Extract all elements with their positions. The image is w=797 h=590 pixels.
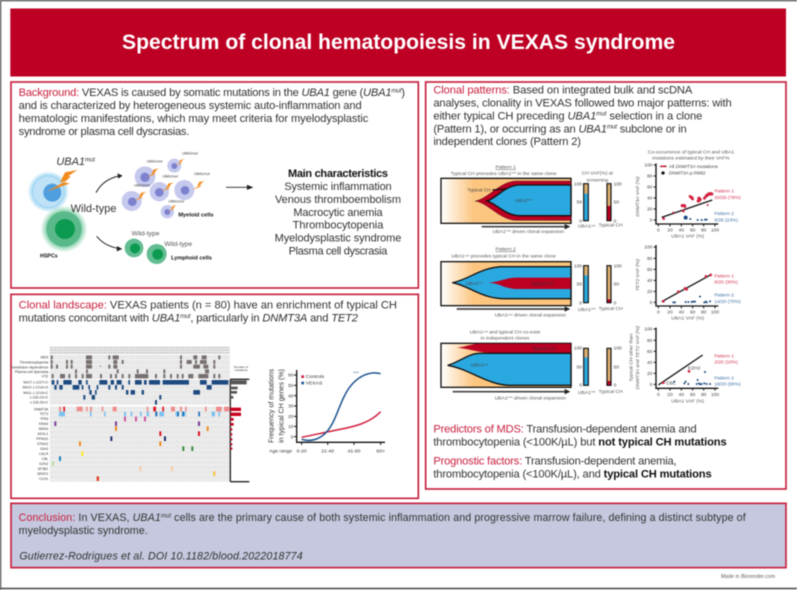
scatter plot: other typical CH VAF: Pattern 1 (714, 354, 734, 360)
legend: Controls (306, 374, 325, 380)
scatter plot: TET2 VAF: 14/20 (70%) (714, 299, 741, 305)
legend (301, 374, 325, 386)
row labels: STAG2 (37, 442, 48, 446)
clonal patterns text: mut (607, 124, 617, 131)
clonal landscape text: Clonal landscape: VEXAS patients (n = 80) have an enrichment of typical CH (19, 300, 397, 312)
conclusion text: mut (161, 514, 171, 520)
scatter plot: other typical CH VAF: 60 (690, 392, 696, 398)
pattern 1 fish plot: UBA1 (493, 229, 506, 235)
pattern 1 fish plot (441, 164, 571, 235)
clonal patterns text: selection in a clone (606, 110, 702, 122)
scatter plot: DNMT3A VAF: 20 (647, 207, 653, 213)
pattern 1 fish plot: mut (511, 171, 516, 175)
scatter plot: other typical CH VAF: Typical CH other than (628, 333, 634, 382)
pattern 1 stacked bars (574, 171, 623, 230)
myeloid cells (122, 159, 194, 218)
row labels: Plasma cell dyscrasia (15, 370, 48, 374)
pattern 1 stacked bars: 0 (614, 218, 617, 224)
row labels: CUX1 (39, 477, 48, 481)
row labels: CALR (39, 452, 49, 456)
scatter plot: other typical CH VAF: 40 (647, 360, 653, 366)
predictors and prognostic factors text: thrombocytopenia (<100K/µL) but not typical CH mutations (433, 437, 727, 449)
pattern 2 fish plot: mut (478, 281, 483, 285)
row labels: TP53 (40, 417, 48, 421)
scatter plot: DNMT3A VAF: 60 (690, 227, 696, 233)
diagram: HSPC differentiation: UBA1mut (162, 175, 179, 179)
pattern 2 fish plot: UBA1 (466, 282, 478, 287)
pattern 1 stacked bars: CH VAF(%) at (582, 171, 614, 177)
scatter plot: TET2 VAF: 80 (647, 256, 653, 262)
scatter plot: other typical CH VAF: 40 (679, 392, 684, 398)
pattern 3 stacked bars: mut (591, 390, 596, 394)
main characteristics list: Systemic inflammation (284, 181, 392, 193)
row labels: ASXL1 (37, 432, 48, 436)
row labels: c.118-2A>C (30, 401, 49, 405)
pattern 3 stacked bars: 100 (614, 346, 622, 352)
scatter plot: TET2 VAF: UBA1 VAF (%) (671, 315, 704, 321)
pattern 2 stacked bars: UBA1 (578, 307, 591, 313)
diagram: HSPC differentiation: UBA1mut (194, 172, 211, 176)
scatter plot: other typical CH VAF: DNMT3A and TET2 VAF (%) (635, 326, 641, 389)
scatter plot: TET2 VAF: 80 (701, 309, 707, 315)
pattern 1 stacked bars: screening (587, 177, 608, 183)
pattern 1 fish plot: Pattern 1 (496, 164, 516, 170)
scatter plot: TET2 VAF: 0 (657, 309, 660, 315)
scatter plot: DNMT3A VAF: 40 (647, 196, 653, 202)
pattern 2 headings: UBA1 (451, 254, 464, 260)
icon: lightning bolt (47, 170, 77, 192)
pattern 3 fish plot: Typical CH (532, 346, 556, 352)
row labels: M41L c.121A>C (23, 391, 49, 395)
scatter plot: DNMT3A VAF: 100 (644, 163, 653, 169)
oncoprint heatmap (10, 347, 230, 482)
diagram: HSPC differentiation: UBA1mut (182, 152, 199, 156)
UBA1 variant rows (52, 380, 228, 405)
pattern 2 stacked bars: 0 (579, 300, 582, 306)
line chart: frequency of CH mutations by age: Age range (269, 448, 292, 454)
line chart: frequency of CH mutations by age: 50 (288, 383, 294, 388)
pattern 1 fish plot: mut (528, 198, 532, 202)
scatter plot: other typical CH VAF: 80 (647, 338, 653, 344)
predictors and prognostic factors text: thrombocytopenia (<100K/µL), and typical CH mutations (433, 468, 712, 480)
diagram: HSPC differentiation: HSPCs (40, 253, 58, 259)
scatter plot: other typical CH VAF: 100 (711, 392, 719, 398)
pattern 2 fish plot: mut (508, 312, 513, 316)
pattern 3 fish plot: in independent clones (481, 336, 530, 342)
row labels: SRSF2 (37, 472, 48, 476)
scatter plot: DNMT3A VAF: 100 (711, 227, 719, 233)
pattern 3 stacked bars: UBA1 (578, 390, 591, 396)
pattern 3 fish plot: UBA1 (470, 330, 483, 336)
pattern 1 stacked bars: Typical CH (599, 223, 623, 229)
credit: Made in Biorender.com (721, 574, 775, 580)
diagram: HSPC differentiation: Wild-type (71, 203, 116, 215)
pattern 2 fish plot (441, 262, 571, 319)
title banner (10, 8, 786, 76)
scatter plot: other typical CH VAF: 20 (647, 371, 653, 377)
clonal landscape text: mut (180, 313, 191, 320)
pattern 2 stacked bars: 0 (614, 300, 617, 306)
background text: and is characterized by heterogeneous systemic auto-inflammation and (19, 100, 362, 112)
red curve: controls (302, 412, 381, 437)
pattern 1 fish plot: Typical CH (467, 187, 491, 193)
scatter plot: TET2 VAF: 6/20 (30%) (714, 280, 738, 286)
clonal landscape text: mutations concomitant with UBA1 (19, 313, 180, 325)
scatter plot: DNMT3A VAF: 0 (657, 227, 660, 233)
pattern 2 and 3 charts (441, 245, 741, 405)
row labels: Transfusion dependence (10, 365, 48, 369)
background text: mut (391, 87, 402, 94)
pattern 1 stacked bars: mut (591, 223, 596, 227)
row labels: PPM1D (36, 437, 49, 441)
diagram: HSPC differentiation: UBA1mut (147, 159, 163, 163)
scatter plot: other typical CH VAF: 20 (667, 392, 673, 398)
row labels: EZH2 (39, 462, 48, 466)
lymphoid cells: Lymphoid cells (171, 255, 212, 261)
row labels: c.118-1G>C (30, 396, 49, 400)
background text: ) (401, 87, 405, 99)
clonal patterns text: (Pattern 1), or occurring as an UBA1 (433, 123, 607, 135)
line chart: frequency of CH mutations by age: 20 (288, 414, 294, 419)
predictors and prognostic factors text: Prognostic factors: Transfusion-dependent anemia, (433, 455, 677, 467)
pattern 2 stacked bars: mut (591, 307, 596, 311)
row labels: TET2 (40, 412, 48, 416)
row labels: CBL (42, 457, 48, 461)
scatter plot: TET2 VAF: 40 (647, 278, 653, 284)
scatter plot: other typical CH VAF: 18/20 (90%) (714, 382, 741, 388)
scatter plot: DNMT3A VAF: mutations estimated by their VAF% (652, 156, 730, 162)
line chart: frequency of CH mutations by age: 60> (376, 448, 385, 454)
clonal patterns text: Clonal patterns: Based on integrated bulk and scDNA (433, 85, 693, 97)
line chart: frequency of CH mutations by age: 41-60 (348, 448, 361, 454)
predictors and prognostic factors text (433, 424, 727, 480)
main characteristics list: Thrombocytopenia (293, 220, 384, 232)
clonal patterns text: mut (596, 111, 607, 118)
scatter plot: TET2 VAF: 60 (647, 267, 653, 273)
scatter plot: DNMT3A VAF (635, 149, 741, 239)
pattern 2 stacked bars: 100 (614, 263, 622, 269)
pattern 3 stacked bars: 0 (614, 383, 617, 389)
row labels: DNMT3A (34, 407, 49, 411)
pattern 1 stacked bars: 50 (577, 200, 582, 206)
scatter plot: other typical CH VAF: 60 (647, 349, 653, 355)
conclusion text: Conclusion: In VEXAS, UBA1 (19, 512, 161, 524)
scatter plot: DNMT3A VAF: 20/26 (78%) (714, 195, 741, 201)
pattern 3 fish plot: mut (483, 329, 488, 333)
row labels: VTE (42, 375, 49, 379)
clonal patterns text (433, 85, 732, 148)
row labels: KRAS (39, 422, 49, 426)
clonal landscape text (19, 300, 397, 325)
line chart: frequency of CH mutations by age: 0 (291, 434, 294, 439)
scatter plot: DNMT3A VAF: 80 (647, 174, 653, 180)
conclusion text: cells are the primary cause of both systemic inflammation and progressive marrow failure, defining a distinct subtype of (171, 512, 746, 524)
arrow: to myeloid (96, 176, 119, 193)
scatter plot: DNMT3A VAF: 6/26 (23%) (714, 217, 738, 223)
pattern 2 fish plot: driven clonal expansion (513, 313, 566, 319)
pattern 3 stacked bars: 0 (579, 383, 582, 389)
row labels: SF3B1 (38, 467, 48, 471)
panel: conclusion (11, 503, 786, 568)
title banner: Spectrum of clonal hematopoiesis in VEXAS syndrome (122, 31, 675, 54)
pattern 1 stacked bars: 0 (579, 218, 582, 224)
scatter plot: DNMT3A VAF: All DNMT3A mutations (669, 164, 718, 170)
pattern 3 fish plot: UBA1 (471, 364, 484, 369)
scatter plot: TET2 VAF: 100 (711, 309, 719, 315)
clinical rows (51, 355, 220, 378)
y axis label (269, 369, 286, 443)
pattern 2 headings: mut (464, 253, 470, 257)
lymphoid cells (125, 230, 212, 264)
scatter plot: TET2 VAF: Pattern 2 (714, 293, 734, 299)
line chart: frequency of CH mutations by age: 21-40 (321, 448, 334, 454)
scatter plot: other typical CH VAF: 0 (657, 392, 660, 398)
scatter plot: DNMT3A VAF: 80 (701, 227, 707, 233)
clonal patterns text: independent clones (Pattern 2) (433, 136, 581, 148)
pattern 3 stacked bars (574, 346, 623, 396)
pattern 1 fish plot: UBA1 (515, 199, 528, 204)
panel: clonal patterns (426, 82, 786, 489)
pattern 1 stacked bars: 50 (614, 200, 619, 206)
predictors and prognostic factors text: Predictors of MDS: Transfusion-dependent anemia and (433, 424, 697, 436)
pattern 3 fish plot (441, 329, 571, 401)
main characteristics list: Venous thromboembolism (275, 194, 401, 206)
background text: Background: VEXAS is caused by somatic mutations in the UBA1 gene (UBA1 (19, 87, 392, 99)
bar chart: number of mutations: mutations (235, 368, 248, 372)
clonal landscape text: DNMT3A and TET2 (262, 313, 358, 325)
pattern 3 fish plot: mut (484, 362, 488, 366)
gene mutation rows (52, 407, 229, 481)
line chart: frequency of CH mutations by age (269, 369, 385, 454)
background text: hematologic manifestations, which may meet criteria for myelodysplastic (19, 113, 369, 125)
clonal patterns text: analyses, clonality in VEXAS followed two major patterns: with (433, 98, 732, 110)
scatter plot: DNMT3A VAF: Pattern 2 (714, 211, 734, 217)
scatter plot: DNMT3A VAF: DNMT3A p.R882 (669, 171, 706, 177)
pattern 2 stacked bars (574, 263, 623, 313)
background text (19, 87, 405, 138)
scatter plot: other typical CH VAF: UBA1 VAF (%) (671, 399, 704, 405)
row labels: NRAS (39, 427, 49, 431)
diagram: HSPC differentiation: UBA1mut (134, 184, 151, 188)
diagram: HSPC differentiation: UBA1mut (168, 200, 185, 204)
pattern 1 stacked bars: UBA1 (578, 224, 591, 230)
pattern 2 stacked bars: 50 (614, 282, 619, 288)
row labels: M41T c.122T>C (23, 381, 49, 385)
main characteristics list: Plasma cell dyscrasia (289, 245, 388, 257)
scatter plot: TET2 VAF: 0 (650, 300, 653, 306)
scatter plot: TET2 VAF: 100 (644, 245, 653, 251)
pattern 3 stacked bars: 50 (614, 364, 619, 370)
panel: background (11, 82, 418, 288)
scatter plot: other typical CH VAF: 0 (650, 382, 653, 388)
pattern 2 stacked bars: Typical CH (599, 306, 623, 312)
legend: VEXAS (306, 380, 323, 386)
pattern 1 fish plot: driven clonal expansion (511, 229, 564, 235)
y axis label: Frequency of mutations (269, 369, 276, 443)
diagram: HSPC differentiation (28, 152, 214, 264)
scatter plot: DNMT3A VAF: UBA1 VAF (%) (671, 233, 704, 239)
diagram: HSPC differentiation: Myeloid cells (178, 213, 214, 219)
y axis label: in typical CH genes (%) (279, 369, 286, 443)
pattern 3 stacked bars: 100 (574, 346, 582, 352)
scatter plot: TET2 VAF: Pattern 1 (714, 273, 734, 279)
bar chart: number of mutations (230, 365, 249, 482)
line chart: frequency of CH mutations by age: 10 (288, 424, 294, 429)
row labels (10, 356, 49, 481)
diagram: HSPC differentiation: UBA1 (56, 156, 85, 168)
main characteristics list: Main characteristics (288, 168, 388, 180)
lymphoid cells: Wild-type (132, 230, 160, 237)
conclusion text: myelodysplastic syndrome. (19, 525, 148, 537)
scatter plot: DNMT3A VAF: 40 (679, 227, 684, 233)
scatter plot: TET2 VAF: 40 (679, 309, 684, 315)
scatter plot: other typical CH VAF (628, 326, 741, 405)
background text: syndrome or plasma cell dyscrasias. (19, 126, 189, 138)
pattern 1 fish plot: in the same clone (516, 171, 557, 177)
scatter plot: other typical CH VAF: 100 (644, 327, 653, 333)
pattern 3 stacked bars: Typical CH (599, 389, 623, 395)
row labels: MDS (41, 356, 49, 360)
scatter plot: other typical CH VAF: 2/20 (10%) (714, 360, 738, 366)
scatter plot: DNMT3A VAF: DNMT3A VAF (%) (635, 176, 641, 217)
scatter plot: TET2 VAF (635, 245, 741, 321)
row labels: Thrombocytopenia (19, 360, 48, 364)
line chart: frequency of CH mutations by age: 40 (288, 393, 294, 398)
blue curve: VEXAS (302, 373, 381, 440)
clonal patterns text: either typical CH preceding UBA1 (433, 110, 596, 122)
pattern 3 fish plot: driven clonal expansion (513, 395, 566, 401)
line chart: frequency of CH mutations by age: 30 (288, 404, 294, 409)
scatter plot: DNMT3A VAF: Pattern 1 (714, 189, 734, 195)
pattern 1 stacked bars: 100 (614, 181, 622, 187)
main characteristics list (275, 168, 401, 257)
arrow: to main characteristics (226, 185, 252, 189)
row labels: M41V c.121A>G (23, 386, 49, 390)
pattern 1 fish plot: mut (506, 229, 511, 233)
clonal patterns text: subclone or in (617, 123, 687, 135)
pattern 2 stacked bars: 50 (577, 282, 582, 288)
line chart: frequency of CH mutations by age: 0-20 (297, 448, 307, 454)
bar chart: number of mutations: Number of (234, 365, 248, 369)
pattern 1 stacked bars: 100 (574, 181, 582, 187)
pattern 2 fish plot: Typical CH (531, 281, 555, 287)
pattern 2 headings: Pattern 2 (496, 246, 516, 252)
clonal landscape text: , particularly in (190, 313, 263, 325)
main characteristics list: Macrocytic anemia (293, 207, 384, 219)
main characteristics list: Myelodysplastic syndrome (275, 233, 401, 245)
scatter plot: DNMT3A VAF: Co-occurrence of typical CH and UBA1 (648, 149, 734, 155)
pattern 2 headings (451, 246, 556, 260)
scatter plot: DNMT3A VAF: 60 (647, 185, 653, 191)
scatter plot: DNMT3A VAF: 20 (667, 227, 673, 233)
pattern 2 stacked bars: 100 (574, 263, 582, 269)
panel: clonal landscape (10, 294, 418, 498)
pattern 2 headings: precedes typical CH in the same clone (469, 254, 556, 260)
lymphoid cells: Wild-type (164, 241, 192, 248)
scatter plot: other typical CH VAF: EZH2 (688, 365, 701, 371)
pattern 3 fish plot: mut (508, 395, 513, 399)
scatter plot: TET2 VAF: 60 (690, 309, 696, 315)
line chart: frequency of CH mutations by age: 60 (288, 373, 294, 378)
scatter plot: TET2 VAF: 20 (647, 289, 653, 295)
pattern 2 fish plot: UBA1 (495, 313, 508, 319)
scatter plot: TET2 VAF: 20 (667, 309, 673, 315)
line chart: frequency of CH mutations by age: *** (353, 370, 359, 376)
pattern 3 fish plot: UBA1 (495, 395, 508, 401)
citation: Gutierrez-Rodrigues et al. DOI 10.1182/blood.2022018774 (19, 551, 303, 563)
scatter plot: other typical CH VAF: 80 (701, 392, 707, 398)
scatter plot: other typical CH VAF: CBL (666, 380, 676, 386)
scatter plot: other typical CH VAF: Pattern 2 (714, 375, 734, 381)
pattern 1 fish plot: Typical CH precedes UBA1 (451, 171, 511, 177)
pattern 3 fish plot: and typical CH co-exist (488, 330, 541, 336)
conclusion text (19, 512, 746, 537)
scatter plot: TET2 VAF: TET2 VAF (%) (635, 259, 641, 291)
diagram: HSPC differentiation: mut (85, 157, 95, 163)
pattern 3 stacked bars: 50 (577, 364, 582, 370)
row labels: IDH2 (40, 447, 48, 451)
scatter plot: DNMT3A VAF: 0 (650, 218, 653, 224)
arrow: to lymphoid (97, 236, 118, 248)
